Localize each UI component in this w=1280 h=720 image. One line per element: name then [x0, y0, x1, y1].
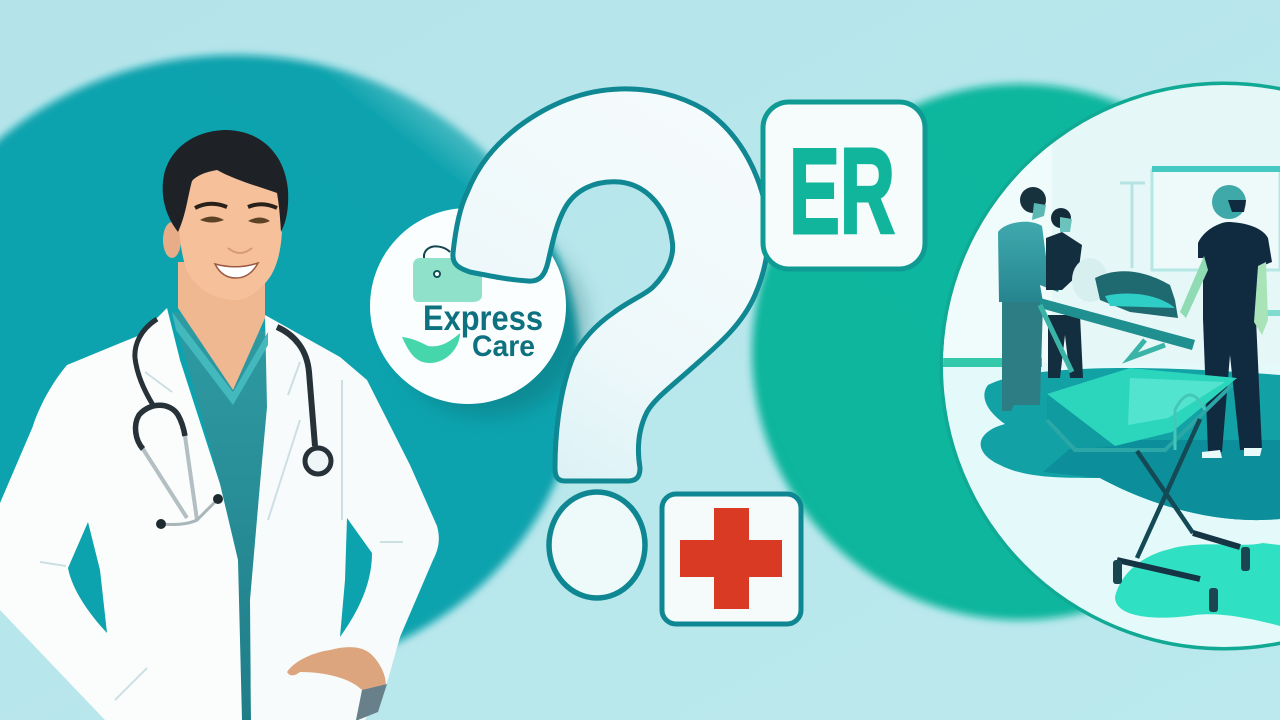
stretcher: [1047, 368, 1250, 612]
gurney: [1040, 298, 1195, 372]
panel: ER scene circle: [940, 84, 1280, 650]
window frame: [1152, 170, 1280, 270]
coat left side: [0, 308, 242, 720]
icon: leaf swoosh: [402, 333, 460, 363]
patient on gurney: [1072, 258, 1178, 318]
person left: [998, 187, 1062, 411]
logo text: Express: [423, 299, 543, 338]
panel: teal circle behind doctor: [0, 55, 580, 679]
hair: [163, 130, 288, 232]
icon: medical bag: [413, 258, 482, 302]
face: [178, 168, 282, 300]
neck: [178, 262, 265, 390]
icon: red cross: [662, 494, 801, 624]
coat folds: [40, 362, 403, 700]
icon: question mark: [453, 89, 768, 598]
scrubs: [173, 312, 268, 720]
person right: [1180, 185, 1272, 458]
wall stripe: [942, 358, 1042, 367]
green floor patch: [1115, 543, 1280, 626]
doctor: [0, 130, 439, 720]
arm gap right: [340, 518, 372, 637]
eyebrows: [195, 204, 277, 208]
IV pole: [1120, 182, 1145, 268]
hand in pocket: [287, 647, 386, 712]
eyes: [200, 216, 270, 224]
badge: Express Care: Care: [472, 330, 535, 363]
arm gap left: [68, 522, 107, 633]
smile: [215, 263, 258, 278]
coat right side: [250, 315, 439, 720]
nose: [228, 248, 252, 253]
panel: green circle behind ER scene: [752, 84, 1280, 620]
stethoscope: [135, 319, 331, 529]
badge: ER: [763, 102, 925, 269]
ear: [163, 222, 181, 258]
question mark dot: [549, 492, 645, 598]
floor shadow: [981, 368, 1280, 520]
person middle: [1046, 208, 1083, 378]
badge: Express Care: [370, 208, 586, 416]
scrub collar: [172, 312, 268, 405]
badge: ER: ER: [789, 123, 895, 259]
